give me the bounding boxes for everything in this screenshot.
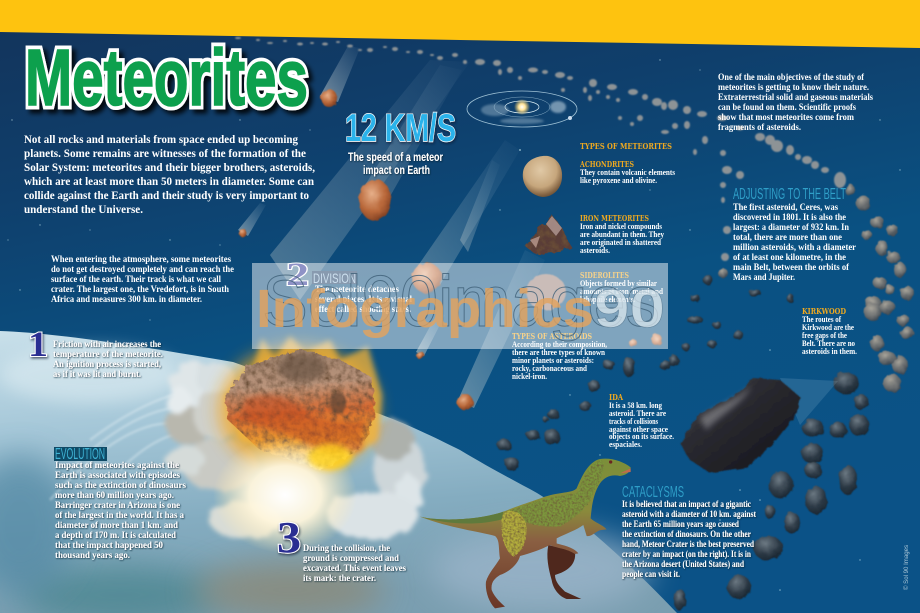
panel: cataclysms: the Arizona desert (United States) and bbox=[622, 559, 745, 570]
atmosphere text: crater. The largest one, the Vredefort, is in South bbox=[51, 284, 229, 294]
panel: types of asteroids: TYPES OF ASTEROIDS bbox=[512, 331, 592, 341]
right intro text: One of the main objectives of the study of bbox=[718, 72, 865, 83]
intro text: Not all rocks and materials from space ended up becoming bbox=[24, 134, 298, 146]
panel: adjusting to the belt: discovered in 1801. It is also the bbox=[733, 212, 847, 223]
atmosphere text: surface of the earth. Their track is what we call bbox=[51, 274, 221, 284]
panel: kirkwood: The routes of bbox=[802, 315, 841, 324]
panel: cataclysms bbox=[622, 484, 757, 580]
atmosphere text: When entering the atmosphere, some meteorites bbox=[51, 254, 231, 264]
panel: evolution: a depth of 170 m. It is calculated bbox=[55, 530, 177, 541]
panel: cataclysms: It is believed that an impact of a gigantic bbox=[622, 499, 752, 510]
panel: kirkwood: Belt. There are no bbox=[802, 339, 855, 348]
title: Meteorites bbox=[25, 33, 308, 122]
panel: kirkwood bbox=[802, 306, 857, 356]
intro text: planets. Some remains are witnesses of the formation of the bbox=[24, 148, 306, 160]
panel: ida: It is a 58 km. long bbox=[609, 401, 663, 410]
panel: ida: IDA bbox=[609, 392, 624, 402]
panel: evolution: Barringer crater in Arizona is one bbox=[55, 500, 181, 511]
panel: evolution: EVOLUTION bbox=[55, 446, 105, 463]
panel: adjusting to the belt: of at least one kilometre, in the bbox=[733, 252, 847, 263]
panel: kirkwood: KIRKWOOD bbox=[802, 306, 846, 316]
panel: evolution: such as the extinction of dinosaurs bbox=[55, 480, 186, 491]
step 3: its mark: the crater. bbox=[303, 573, 376, 584]
title: Meteorites bbox=[25, 33, 308, 122]
right intro text: fragments of asteroids. bbox=[718, 122, 801, 133]
speed callout bbox=[345, 107, 456, 177]
panel: cataclysms: crater by an impact (on the right). It is in bbox=[622, 549, 752, 560]
right intro text: can be found on them. Scientific proofs bbox=[718, 102, 856, 113]
iron meteorites text: are originated in shattered bbox=[580, 238, 661, 247]
panel: kirkwood: Kirkwood are the bbox=[802, 323, 854, 332]
panel: evolution: of the largest in the world. It has a bbox=[55, 510, 184, 521]
panel: adjusting to the belt bbox=[733, 186, 857, 283]
iron meteorites text: Iron and nickel compounds bbox=[580, 222, 663, 231]
asteroid: Ida bbox=[680, 378, 800, 473]
panel: cataclysms: asteroid with a diameter of 10 km. against bbox=[622, 509, 757, 520]
main meteor on fire bbox=[213, 336, 382, 553]
panel: ida: asteroid. There are bbox=[609, 409, 666, 418]
panel: kirkwood: free gaps of the bbox=[802, 331, 847, 340]
intro text: collide against the Earth and their study is very important to bbox=[24, 190, 309, 202]
asteroid field: dark rocks bbox=[497, 275, 869, 611]
siderolites text: lithophile elements. bbox=[580, 295, 635, 304]
panel: cataclysms: the Earth 65 million years ago caused bbox=[622, 519, 740, 530]
rock: siderolite bbox=[526, 274, 566, 310]
atmosphere text: do not get destroyed completely and can reach the bbox=[51, 264, 234, 274]
panel: ida: tracks of collisions bbox=[609, 417, 659, 426]
step 3: ground is compressed and bbox=[303, 553, 400, 564]
panel: types of asteroids: nickel-iron. bbox=[512, 372, 547, 381]
step 1: temperature of the meteorite. bbox=[53, 349, 163, 360]
right intro text: Extraterrestrial solid and gaseous materials bbox=[718, 92, 873, 103]
panel: adjusting to the belt: total, there are more than one bbox=[733, 232, 843, 243]
panel: cataclysms: hand, Meteor Crater is the best preserved bbox=[622, 539, 755, 550]
asteroid belt: right arc bbox=[718, 184, 914, 392]
Earth bbox=[0, 331, 677, 613]
panel: types of asteroids: minor planets or asteroids: bbox=[512, 356, 594, 365]
siderolites text: Objects formed by similar bbox=[580, 279, 657, 288]
far leg bbox=[547, 545, 581, 599]
speed callout: 12 KM/S bbox=[345, 107, 456, 150]
watermark: Sol90images bbox=[262, 262, 660, 342]
step 3: excavated. This event leaves bbox=[303, 563, 406, 574]
falling meteors bbox=[239, 89, 662, 410]
step 2: division: The meteorite detaches bbox=[315, 284, 399, 295]
panel: ida: espaciales. bbox=[609, 440, 642, 449]
step 1: An ignition process is started, bbox=[53, 359, 162, 370]
panel: adjusting to the belt: million asteroids, with a diameter bbox=[733, 242, 857, 253]
panel: evolution: that the impact happened 50 bbox=[55, 540, 163, 551]
step 1: Friction with air increases the bbox=[53, 339, 162, 350]
panel: evolution: more than 60 million years ago. bbox=[55, 490, 174, 501]
achondrites text: They contain volcanic elements bbox=[580, 168, 676, 177]
right intro text: show that most meteorites come from bbox=[718, 112, 854, 123]
panel: adjusting to the belt: main Belt, between the orbits of bbox=[733, 262, 850, 273]
step 1: as if it was lit and burnt. bbox=[53, 369, 141, 380]
impact clouds bbox=[165, 362, 426, 539]
step 2: division: 2 bbox=[286, 257, 309, 293]
step 2: division: several pieces. It is a visual bbox=[315, 294, 412, 305]
back scales bbox=[503, 460, 604, 527]
achondrites text bbox=[579, 159, 676, 185]
step 3: 3 bbox=[277, 513, 301, 562]
panel: types of asteroids: rocky, carbonaceous and bbox=[512, 364, 587, 373]
panel: adjusting to the belt: largest: a diameter of 932 km. In bbox=[733, 222, 850, 233]
panel: kirkwood: asteroids in them. bbox=[802, 347, 857, 356]
panel: ida: objects on its surface. bbox=[609, 432, 674, 441]
step 2: division bbox=[286, 257, 412, 315]
atmosphere text: Africa and measures 300 km. in diameter. bbox=[51, 294, 202, 304]
achondrites text: like pyroxene and olivine. bbox=[580, 176, 657, 185]
iron meteorites text: IRON METEORITES bbox=[580, 213, 649, 223]
meteor trails bbox=[238, 46, 545, 408]
panel: types of asteroids: there are three types of known bbox=[512, 348, 605, 357]
panel: evolution bbox=[54, 446, 186, 561]
step 2: division: effect called shooting stars. bbox=[315, 304, 411, 315]
iron meteorites text: asteroids. bbox=[580, 246, 610, 255]
iron meteorites text: are abundant in them. They bbox=[580, 230, 665, 239]
panel: types of meteorites: TYPES OF METEORITES bbox=[580, 141, 672, 151]
watermark: Infographics bbox=[256, 279, 594, 339]
siderolites text bbox=[580, 270, 663, 304]
panel: evolution: Earth is associated with episodes bbox=[55, 470, 180, 481]
thigh bbox=[502, 511, 526, 557]
panel: types of asteroids: According to their composition, bbox=[512, 340, 607, 349]
panel: cataclysms: the extinction of dinosaurs. On the other bbox=[622, 529, 752, 540]
watermark: 90 bbox=[594, 279, 665, 339]
panel: evolution: diameter of more than 1 km. and bbox=[55, 520, 179, 531]
panel: adjusting to the belt: Mars and Jupiter. bbox=[733, 272, 795, 283]
siderolites text: amounts of iron, metal and bbox=[580, 287, 663, 296]
intro text: which are at least more than 50 meters in diameter. Some can bbox=[24, 176, 315, 188]
achondrites text: ACHONDRITES bbox=[579, 159, 634, 169]
rock: achondrite bbox=[523, 156, 562, 197]
body bbox=[420, 459, 631, 608]
tail bbox=[420, 512, 503, 524]
panel: types of meteorites bbox=[523, 141, 676, 310]
right intro text: meteorites is getting to know their nature. bbox=[718, 82, 869, 93]
step 3: During the collision, the bbox=[303, 543, 391, 554]
step 3 bbox=[277, 513, 406, 584]
panel: cataclysms: CATACLYSMS bbox=[622, 484, 684, 501]
panel: adjusting to the belt: The first asteroid, Ceres, was bbox=[733, 202, 838, 213]
panel: cataclysms: people can visit it. bbox=[622, 569, 680, 580]
credit: © Sol 90 Images bbox=[903, 545, 910, 590]
step 2: division: DIVISION bbox=[313, 270, 356, 286]
speed callout: The speed of a meteor bbox=[348, 152, 443, 164]
intro text: Solar System: meteorites and their bigger brothers, asteroids, bbox=[24, 162, 315, 174]
iron meteorites text bbox=[580, 213, 665, 255]
siderolites text: SIDEROLITES bbox=[580, 270, 629, 280]
solar system diagram bbox=[467, 91, 577, 127]
right intro text bbox=[718, 72, 873, 133]
panel: ida bbox=[609, 392, 674, 449]
panel: types of asteroids bbox=[512, 331, 607, 381]
step 1 bbox=[28, 324, 163, 380]
intro text bbox=[24, 134, 315, 216]
panel: evolution: Impact of meteorites against the bbox=[55, 460, 180, 471]
step 1: 1 bbox=[28, 324, 48, 364]
top banner bbox=[0, 0, 920, 48]
light wedge to Ida bbox=[780, 378, 838, 425]
intro text: understand the Universe. bbox=[24, 204, 143, 216]
asteroid belt: upper arc bbox=[235, 37, 846, 261]
panel: evolution: thousand years ago. bbox=[55, 550, 130, 561]
rock: iron meteorite bbox=[525, 215, 572, 254]
speed callout: impact on Earth bbox=[363, 165, 430, 177]
panel: ida: against other space bbox=[609, 425, 668, 434]
dinosaur bbox=[420, 459, 631, 608]
atmosphere text bbox=[51, 254, 234, 304]
